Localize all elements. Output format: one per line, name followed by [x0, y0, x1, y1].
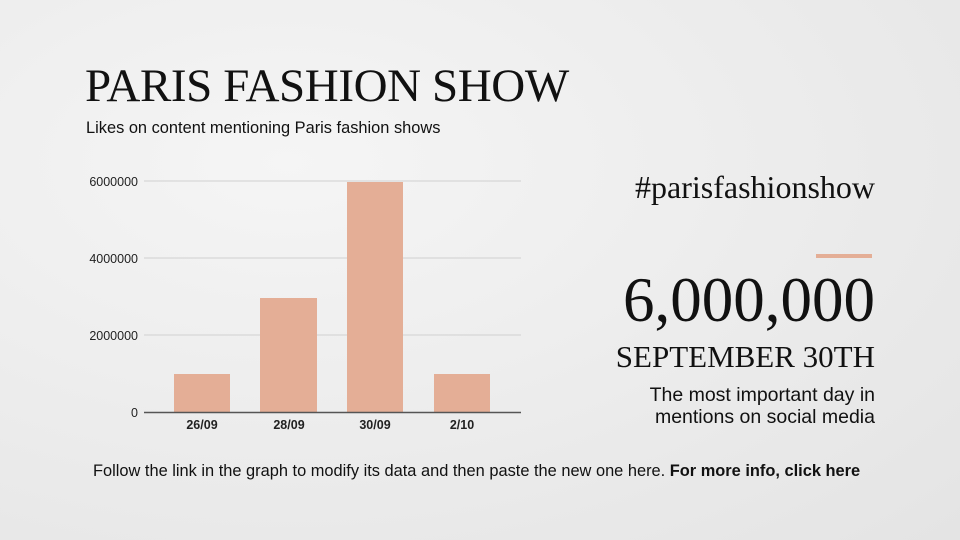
bar chart: 6000000 [89, 175, 138, 189]
bar chart: 0 [131, 406, 138, 420]
accent line [816, 254, 872, 258]
big number: 6,000,000 [623, 265, 875, 335]
date: SEPTEMBER 30TH [616, 339, 875, 374]
hashtag: #parisfashionshow [635, 169, 875, 205]
bar chart [89, 175, 521, 432]
description: mentions on social media [655, 406, 875, 428]
subtitle: Likes on content mentioning Paris fashion shows [86, 119, 440, 137]
title: PARIS FASHION SHOW [85, 60, 569, 112]
bar chart: 26/09 [186, 418, 218, 432]
bar chart: 28/09 [273, 418, 305, 432]
bar chart: 4000000 [89, 252, 138, 266]
bar chart: 2/10 [450, 418, 474, 432]
bar chart: 30/09 [359, 418, 391, 432]
description: The most important day in [650, 384, 875, 406]
bar chart: 2000000 [89, 329, 138, 343]
description [650, 384, 875, 428]
footer: Follow the link in the graph to modify its data and then paste the new one here. For more info, click here [93, 462, 860, 480]
